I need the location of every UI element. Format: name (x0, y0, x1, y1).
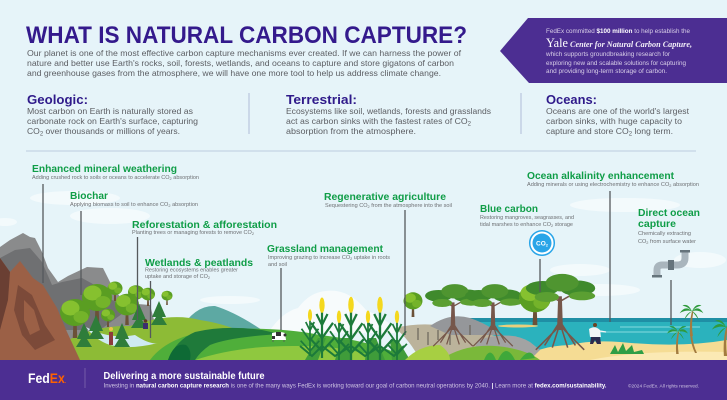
footer heading: Delivering a more sustainable future (104, 371, 265, 382)
label: Wetlands and peatlands: Restoring ecosystems enables greater (145, 268, 238, 274)
column: Terrestrial: act as carbon sinks with the fastest rates of CO (286, 116, 466, 126)
label: Blue carbon: Blue carbon (480, 203, 538, 215)
callout: Yale center: which supports groundbreaking research for (545, 51, 670, 58)
callout: Yale center: Center for Natural Carbon Capture, (570, 40, 692, 49)
label: Direct ocean capture: CO (638, 239, 646, 245)
label: Biochar: 2 (168, 204, 171, 208)
label: Ocean alkalinity enhancement: Adding minerals or using electrochemistry to enhance CO (527, 182, 660, 188)
intro text (27, 48, 462, 78)
label: Wetlands and peatlands: uptake and storage of CO (145, 274, 204, 280)
label: Blue carbon: Restoring mangroves, seagrasses, and (480, 215, 574, 221)
label: Enhanced mineral weathering: Adding crushed rock to soils or oceans to accelerate CO (32, 175, 161, 181)
column: Oceans: Oceans: (546, 92, 597, 107)
title: WHAT IS NATURAL CARBON CAPTURE? (26, 22, 467, 49)
label: Regenerative agriculture: Sequestering CO (325, 203, 365, 209)
icon: CO2 badge (529, 230, 555, 256)
label: Regenerative agriculture: from the atmosphere into the soil (370, 203, 452, 209)
label: Direct ocean capture: Direct ocean (638, 207, 700, 219)
label: Wetlands and peatlands: 2 (208, 276, 210, 280)
pointer lines (43, 184, 671, 338)
copyright: ©2024 FedEx. All rights reserved. (628, 384, 699, 388)
column: Terrestrial: Ecosystems like soil, wetlands, forests and grasslands (286, 106, 491, 116)
column: Geologic: carbonate rock on Earth's surface, capturing (27, 116, 198, 126)
label: Ocean alkalinity enhancement: 2 (669, 184, 671, 188)
intro text: nature and better use Earth's rocks, soil, forests, wetlands, and oceans to capture and store gigatons of carbon (27, 58, 454, 68)
cow (272, 332, 286, 342)
label: Direct ocean capture: from surface water (648, 239, 696, 245)
palm trees (667, 305, 727, 356)
column: Oceans: carbon sinks, with huge capacity to (546, 116, 682, 126)
teal mountain (180, 306, 262, 330)
icon: CO2 badge: CO (536, 240, 546, 248)
callout: Yale center: Yale (546, 36, 568, 50)
beach grass (610, 343, 644, 354)
label: Enhanced mineral weathering: 2 (170, 177, 172, 181)
label: Wetlands and peatlands (145, 257, 253, 280)
green field (150, 329, 410, 360)
callout: Yale center: FedEx committed $100 million to help establish the (546, 28, 691, 35)
clouds (0, 191, 726, 304)
ocean (470, 318, 727, 360)
back green hill (60, 317, 262, 360)
column: Terrestrial: Terrestrial: (286, 92, 357, 107)
corn field (300, 297, 407, 360)
grey mountain shading (0, 248, 130, 330)
column: Oceans: 2 (629, 132, 633, 138)
FedEx logo: FedEx. (28, 370, 67, 386)
label: Biochar: absorption (171, 202, 198, 208)
label: Direct ocean capture: 2 (646, 241, 648, 245)
intro text: Our planet is one of the most effective carbon capture mechanisms ever created. If we can harness the power of (27, 48, 462, 58)
label: Direct ocean capture: capture (638, 218, 676, 230)
label: Grassland management (267, 243, 390, 268)
label: Direct ocean capture: Chemically extracting (638, 231, 691, 237)
label: Reforestation: Planting trees or managing forests to remove CO (132, 230, 245, 236)
footer text: Investing in natural carbon capture research is one of the many ways FedEx is working toward our goal of carbon neutral operations by 2040. | Learn more at fedex.com/sustainability. (104, 384, 607, 390)
column: Geologic (27, 92, 198, 138)
callout: Yale center (500, 18, 727, 83)
label: Ocean alkalinity enhancement: Ocean alkalinity enhancement (527, 170, 674, 182)
label: Direct ocean capture (638, 207, 700, 245)
scientist (589, 323, 606, 344)
tan wetland ground (395, 324, 525, 360)
label: Enhanced mineral weathering: Enhanced mineral weathering (32, 163, 177, 175)
label: Reforestation: Reforestation & afforestation (132, 219, 277, 231)
brown cliff (0, 258, 80, 360)
mangroves (404, 274, 595, 360)
column: Geologic: Most carbon on Earth is naturally stored as (27, 106, 193, 116)
label: Blue carbon: storage (553, 222, 573, 228)
label: Ocean alkalinity enhancement (527, 170, 699, 188)
icon: pipe (652, 250, 690, 278)
label: Wetlands and peatlands: Wetlands & peatlands (145, 257, 253, 269)
label: Ocean alkalinity enhancement: absorption (671, 182, 699, 188)
column: Terrestrial (286, 92, 491, 136)
column: Geologic: Geologic: (27, 92, 88, 107)
icon: CO2 badge: 2 (546, 242, 549, 248)
label: Grassland management: 2 (350, 257, 352, 261)
column: Oceans: long term. (632, 126, 673, 136)
column: Oceans: capture and store CO (546, 126, 628, 136)
callout: Yale center: and providing long-term storage of carbon. (546, 68, 667, 75)
intro text: and greenhouse gases from the atmosphere, we will have one more tool to help us address climate change. (27, 68, 441, 78)
label: Blue carbon: 2 (551, 224, 553, 228)
scene: landscape (0, 233, 727, 360)
label: Reforestation: 2 (252, 232, 254, 236)
label: Enhanced mineral weathering: absorption (172, 175, 199, 181)
crop rows (305, 338, 410, 360)
label: Blue carbon (480, 203, 574, 228)
column: Geologic: CO (27, 126, 40, 136)
trees and river (60, 282, 172, 347)
column: Geologic: 2 (40, 132, 44, 138)
label: Biochar: Applying biomass to soil to enhance CO (70, 202, 162, 208)
label: Grassland management: and soil (268, 262, 287, 268)
white cloud hills (268, 291, 400, 333)
column: Oceans (546, 92, 690, 138)
callout: Yale center: exploring new and scalable solutions for capturing (546, 60, 687, 67)
dark forest hill (168, 328, 280, 360)
label: Biochar (70, 190, 198, 208)
footer (0, 360, 727, 400)
label: Grassland management: Grassland management (267, 243, 383, 255)
label: Regenerative agriculture: 2 (368, 205, 370, 209)
column: Oceans: Oceans are one of the world's largest (546, 106, 690, 116)
label: Enhanced mineral weathering (32, 163, 199, 181)
sand (525, 340, 727, 360)
label: Regenerative agriculture: Regenerative agriculture (324, 191, 446, 203)
label: Grassland management: Improving grazing to increase CO (268, 255, 345, 261)
column: Terrestrial: absorption from the atmosphere. (286, 126, 416, 136)
column: Geologic: over thousands or millions of years. (43, 126, 180, 136)
label: Biochar: Biochar (70, 190, 108, 202)
column: Terrestrial: 2 (468, 122, 472, 128)
label: Grassland management: uptake in roots (352, 255, 390, 261)
label: Blue carbon: tidal marshes to enhance CO (480, 222, 547, 228)
label: Regenerative agriculture (324, 191, 452, 209)
